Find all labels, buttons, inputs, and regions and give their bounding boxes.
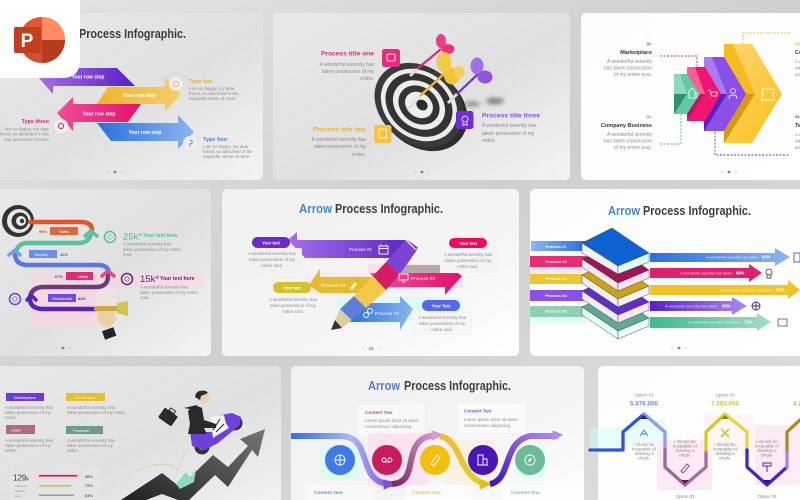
icon: purple medal tile <box>456 111 474 129</box>
target icon <box>2 205 34 237</box>
text: process title three <box>482 112 540 144</box>
labels with text: taken possession of my <box>5 443 52 448</box>
arrow: purple row step <box>39 68 135 94</box>
arrow: process 3 yellow <box>309 269 380 293</box>
label: utility <box>55 272 93 280</box>
label: sales <box>39 227 78 235</box>
label bars left: Process #5 <box>545 308 567 314</box>
option 03 <box>711 392 740 460</box>
text: type four <box>203 137 253 159</box>
text: company business: 02. <box>646 114 652 119</box>
card: blue pill: entire soul. <box>431 327 453 332</box>
icon: pink chat tile <box>382 49 400 67</box>
arrows right: 71% <box>744 320 753 324</box>
icon: green building <box>689 88 697 98</box>
text: type four: Type four <box>203 137 229 143</box>
option 01: incapable of <box>632 446 657 452</box>
option 04: I should be <box>756 439 778 444</box>
card: content two right <box>458 403 525 433</box>
text: marketplace: has taken possession <box>604 66 652 72</box>
pagination: 10 <box>368 346 374 351</box>
icon: people <box>729 89 737 99</box>
text: type four: friend, so absorbed in the <box>203 149 253 154</box>
card: blue pill <box>412 300 472 335</box>
arrows right: 83% <box>762 254 771 260</box>
arrows right: 58% <box>722 304 731 308</box>
text: marketplace: Marketplace <box>620 50 652 56</box>
text: type two: exquisite sense of mere <box>189 96 236 101</box>
chevron: purple <box>704 57 746 131</box>
label bars left <box>530 241 586 323</box>
dart shadows <box>464 98 504 106</box>
labels with text <box>5 393 126 453</box>
stat: 15k: Your text here <box>160 276 195 282</box>
arrows right: A wonderful serenity has taken <box>720 288 772 292</box>
option 03: incapable of <box>713 446 738 452</box>
label: sales: Sales <box>59 229 69 234</box>
arrow: pink row step: Your row step <box>83 112 115 118</box>
pencil <box>331 240 417 330</box>
stat: 15k: taken possession of my entire <box>140 290 199 295</box>
stat card: 129k: here <box>15 494 21 498</box>
node: compass <box>515 445 545 475</box>
arrow: yellow row step: Your row step <box>123 93 155 99</box>
chart: growth arrow <box>121 429 265 500</box>
text: type four: exquisite sense of mere <box>203 154 250 159</box>
card: purple pill <box>241 237 302 273</box>
card: pink pill: entire soul. <box>457 264 479 269</box>
stat: 25k: Your text here <box>143 233 178 239</box>
arrow: process 1 purple: Process #1 <box>349 247 372 252</box>
stat: 15k: 15k* <box>140 274 159 285</box>
card: purple pill: entire soul. <box>261 263 283 268</box>
option 04: single. <box>761 452 773 458</box>
labels with text: entire. <box>5 415 17 420</box>
stat card: 129k: text title <box>15 489 26 493</box>
icon: medal <box>766 269 772 278</box>
node: voicemail <box>372 445 402 475</box>
arrow: process 4 blue: Process #4 <box>375 311 399 316</box>
option 03: I should be <box>714 442 736 447</box>
labels with text: taken possession of my entire. <box>67 410 126 415</box>
labels with text: A wonderful serenity has <box>5 405 54 410</box>
slide title: Process Infographic. <box>79 26 186 41</box>
icon: monitor <box>399 274 408 282</box>
label bars left: Process #2 <box>545 259 567 264</box>
text: process title three: entire. <box>482 138 496 144</box>
text: process title one <box>320 50 374 82</box>
card: content two right: Content Two <box>464 408 492 414</box>
option 01: Option 01 <box>634 392 654 398</box>
labels with text: taken possession of my <box>67 443 114 448</box>
card: blue pill: A wonderful serenity has <box>418 315 467 320</box>
icon: shopping cart <box>708 90 718 96</box>
cards: content one <box>306 485 571 500</box>
text: company business: Company Business <box>601 123 652 129</box>
labels with text: taken possession of my <box>5 410 52 415</box>
path: dark magenta segment with arrowhead <box>30 271 114 298</box>
image artefact highlight <box>32 273 204 326</box>
card: purple pill: taken possession of my <box>249 257 296 262</box>
labels with text: Distribution <box>75 395 95 400</box>
connector: purple dashed <box>715 132 790 155</box>
icon: calendar <box>379 244 388 254</box>
chevron: yellow <box>724 44 782 143</box>
zigzag line <box>590 414 800 485</box>
label: utility: 67% <box>55 274 63 279</box>
arrows right: A wonderful serenity has taken <box>665 304 717 308</box>
arrow: purple row step: Your row step <box>72 74 104 80</box>
dart: yellow <box>408 52 464 109</box>
card: pink pill: taken possession of my <box>445 258 492 263</box>
image artefact highlights <box>590 415 800 490</box>
option 03: single. <box>719 456 731 460</box>
panel: hexagon line options <box>590 366 800 500</box>
arrow: process 1 purple <box>288 232 418 258</box>
card: content two right: Lorem ipsum dolor sit amet, <box>464 417 518 422</box>
connector: pink dashed <box>660 56 697 69</box>
card: yellow pill <box>263 282 322 318</box>
icon: card <box>778 319 787 326</box>
label: display: Display <box>34 252 48 257</box>
dart: pink <box>410 34 454 76</box>
option 04: drawing a <box>757 448 777 453</box>
option 02: Option 02 <box>675 494 695 499</box>
text: process title one: A wonderful serenity has <box>320 62 374 68</box>
text: company business <box>601 114 652 151</box>
text: process title two: taken possession of my <box>314 144 366 150</box>
label bars left: Process #4 <box>545 293 567 298</box>
panel: wavy arrow process <box>291 366 584 500</box>
cards: content one: Content One <box>511 490 540 496</box>
option 01 <box>630 392 659 460</box>
option 03: 7.383.000 <box>711 400 740 408</box>
pagination dots <box>721 171 737 173</box>
option 04: Option 04 <box>757 494 777 499</box>
stat card: 129k: 98% <box>85 474 93 479</box>
stat: 25k: soul. <box>123 252 132 257</box>
panel: winding path to target <box>0 189 211 356</box>
card: pink pill <box>440 238 498 273</box>
stat card: 129k <box>10 467 100 500</box>
stat: 25k: 25k* <box>123 232 142 242</box>
text: process title three: Process title three <box>482 112 540 120</box>
panel: chevron business steps <box>581 13 800 180</box>
labels with text: Sales <box>11 428 21 432</box>
dotted trajectory <box>136 448 188 471</box>
slide title: Process Infographic. <box>643 203 751 218</box>
option 04 <box>755 439 780 499</box>
text: marketplace: A wonderful serenity <box>607 59 652 65</box>
arrow: blue row step <box>97 115 194 149</box>
text: company business: A wonderful serenity <box>607 132 652 138</box>
labels with text: entire. <box>5 448 17 453</box>
text: process title two: A wonderful serenity has <box>312 137 366 143</box>
card: yellow pill: Your text <box>283 286 302 290</box>
node: building <box>468 445 498 475</box>
arrow: process 2 pink <box>370 264 462 295</box>
option 04: incapable of <box>755 444 780 448</box>
text: right column cut off <box>795 41 800 150</box>
label: display: 46% <box>60 252 68 257</box>
ribbon arrows <box>291 431 562 489</box>
arrow: process 4 blue <box>347 296 413 330</box>
option 01: 5.876.000 <box>630 400 659 408</box>
image artefact highlights <box>305 264 463 322</box>
card: content two left: consectetuer adipiscing. <box>365 424 412 429</box>
text: process title three: A wonderful serenity has <box>482 123 537 129</box>
text: company business: of my entire soul. <box>614 145 652 151</box>
label: utility: Utility <box>78 274 88 279</box>
label: display <box>29 250 68 258</box>
node: pen <box>420 445 450 475</box>
illustration: hand throwing dart <box>94 301 128 340</box>
card: content two right: consectetuer adipiscing. <box>464 423 511 428</box>
labels with text: entire. <box>67 448 79 453</box>
panel: pencil arrow process <box>222 189 519 356</box>
path: orange segment <box>30 222 92 230</box>
logo panel: PowerPoint badge <box>0 0 80 78</box>
labels with text: Marketplace <box>14 395 37 400</box>
labels with text: A wonderful serenity has <box>67 438 116 443</box>
slide title <box>299 201 443 216</box>
icon: pink type marker <box>54 119 68 133</box>
text: marketplace: 01. <box>646 41 652 46</box>
icon: ticket <box>762 89 774 100</box>
option 03: Option 03 <box>715 392 735 398</box>
slide title: Process Infographic. <box>335 201 443 216</box>
labels with text: A wonderful serenity has <box>67 405 116 410</box>
option 01: single. <box>638 456 650 460</box>
text: marketplace: of my entire soul. <box>614 72 652 78</box>
text: type two: I am so happy, my dear <box>189 86 235 91</box>
path: purple segment with arrowhead <box>27 295 98 309</box>
stat: 15k: soul. <box>140 295 149 300</box>
slide title <box>608 203 751 218</box>
pagination dots <box>671 347 687 349</box>
text: type three <box>0 119 50 142</box>
cards: content one: Content One <box>314 490 343 496</box>
arrow: process 3 yellow: Process #3 <box>321 283 345 288</box>
text: type four: I am so happy, my dear <box>203 144 249 149</box>
arrow: pink row step <box>57 97 141 131</box>
stat: 15k <box>140 274 199 300</box>
label bars left: Process #1 <box>545 244 567 249</box>
pagination dots <box>107 171 123 173</box>
icon: link <box>364 308 372 318</box>
text: company business: has taken possession <box>604 138 652 144</box>
arrows right: A wonderful serenity has taken <box>706 256 758 260</box>
arrow: process 2 pink: Process #2 <box>411 276 435 281</box>
panel: process infographic with four row arrows <box>0 13 263 180</box>
arrow: blue row step: Your row step <box>129 130 161 136</box>
stat card: 129k: 72% <box>85 483 93 488</box>
text: process title one: taken possession of my <box>322 69 374 75</box>
text: type two: Type two <box>189 79 213 85</box>
icon: building <box>794 253 800 262</box>
slide title: Arrow <box>299 201 333 216</box>
text: type two: friend, so absorbed in the <box>189 91 239 96</box>
plant <box>176 469 196 489</box>
option 01: I should be <box>633 442 655 447</box>
dartboard target <box>358 46 484 168</box>
icon: pencil small <box>350 282 357 290</box>
option 02 <box>673 439 698 499</box>
stat card: 129k: 84% <box>85 493 93 498</box>
icon: yellow type marker <box>169 77 183 91</box>
card: purple pill: Your text <box>262 240 281 246</box>
icon: blue type marker <box>183 136 197 150</box>
card: blue pill: Your Text <box>432 304 451 308</box>
label: residential: Residential <box>52 296 72 301</box>
icon: dark purple ring <box>122 274 132 284</box>
panel: stacked books arrows <box>530 189 800 356</box>
illustration: businessman on scooter <box>184 391 242 454</box>
card: content two left: Content Two <box>365 410 393 415</box>
text: process title one: Process title one <box>321 50 374 58</box>
text: type three: Type three <box>22 119 49 125</box>
icon: green ring <box>104 232 116 242</box>
text: process title three: taken possession of my <box>482 131 535 137</box>
arrows right: A wonderful serenity has taken <box>680 272 732 276</box>
stat: 25k: A wonderful serenity has <box>123 242 172 246</box>
image artefact highlights <box>320 433 545 488</box>
path: green segment with arrowhead <box>16 231 97 252</box>
label bars left: Process #3 <box>545 276 567 281</box>
option 02: single. <box>679 452 691 458</box>
arrows right: A wonderful serenity has taken <box>688 320 740 324</box>
path: blue segment with arrowhead <box>9 250 109 274</box>
pagination dots <box>414 171 430 173</box>
text: process title two: Process title two <box>313 126 366 134</box>
slide title: Arrow <box>368 378 401 393</box>
cards: content one: Content One <box>412 490 441 496</box>
connector: green dashed <box>660 114 681 144</box>
arrows right: 70% <box>776 288 785 292</box>
arrows right: 69% <box>736 270 745 276</box>
labels with text: Products <box>73 428 89 433</box>
label: residential: 84% <box>78 296 86 301</box>
option 02: drawing a <box>675 448 695 453</box>
icon: globe <box>752 302 760 310</box>
card: yellow pill: entire soul. <box>282 309 304 314</box>
text: process title one: entire. <box>360 76 374 82</box>
text: type two <box>189 79 239 101</box>
card: blue pill: taken possession of my <box>419 321 466 326</box>
book stack <box>582 228 649 339</box>
stat card: 129k: Add your <box>15 484 27 488</box>
panel: dartboard process <box>273 13 570 180</box>
labels with text: A wonderful serenity has <box>5 438 54 443</box>
slide title <box>368 378 511 393</box>
stat card: 129k: 129k <box>13 474 29 482</box>
text: marketplace <box>604 41 652 78</box>
arrow: yellow row step <box>97 77 181 112</box>
text: type three: ring and sense of mere <box>4 137 50 142</box>
icon: PowerPoint logo: P <box>21 31 34 52</box>
card: yellow pill: A wonderful serenity has <box>269 297 318 302</box>
text: type three: I am so happy, my dear <box>3 126 50 132</box>
pagination <box>362 346 380 351</box>
text: type three: friend, so absorbed in the <box>0 132 50 136</box>
arrows right <box>650 248 800 331</box>
chevron: green <box>674 74 700 114</box>
stat: 15k: A wonderful serenity has <box>140 284 189 290</box>
option 01: drawing a <box>634 451 654 456</box>
dart: purple <box>448 58 492 103</box>
panel: scooter growth <box>0 366 281 500</box>
label: sales: 90% <box>39 229 47 234</box>
text: process title two: entire. <box>352 152 366 158</box>
peak shadows <box>640 415 771 484</box>
option 02: I should be <box>674 439 696 444</box>
option 03: drawing a <box>715 451 735 456</box>
card: content two left <box>358 405 425 435</box>
card: pink pill: Your text <box>459 241 478 246</box>
card: yellow pill: taken possession of my <box>270 303 317 308</box>
card: content two left: Lorem ipsum dolor sit amet, <box>365 418 419 423</box>
text: process title two <box>312 126 366 158</box>
connector: yellow dashed <box>743 33 790 44</box>
card: purple pill: A wonderful serenity has <box>248 251 297 256</box>
option 02: incapable of <box>673 444 698 448</box>
icon: briefcase <box>158 405 180 427</box>
icon: yellow document tile <box>374 125 392 143</box>
stat: 25k: taken possession of my entire <box>123 247 182 252</box>
stat: 25k <box>123 232 182 257</box>
card: pink pill: A wonderful serenity has <box>444 252 493 257</box>
chevron: pink <box>687 67 721 121</box>
node: globe <box>325 445 355 475</box>
slide title: Process Infographic. <box>404 378 511 393</box>
pagination <box>55 347 71 349</box>
slide title: Arrow <box>608 203 641 218</box>
label: residential <box>48 294 86 302</box>
icon: purple ring <box>10 294 20 304</box>
